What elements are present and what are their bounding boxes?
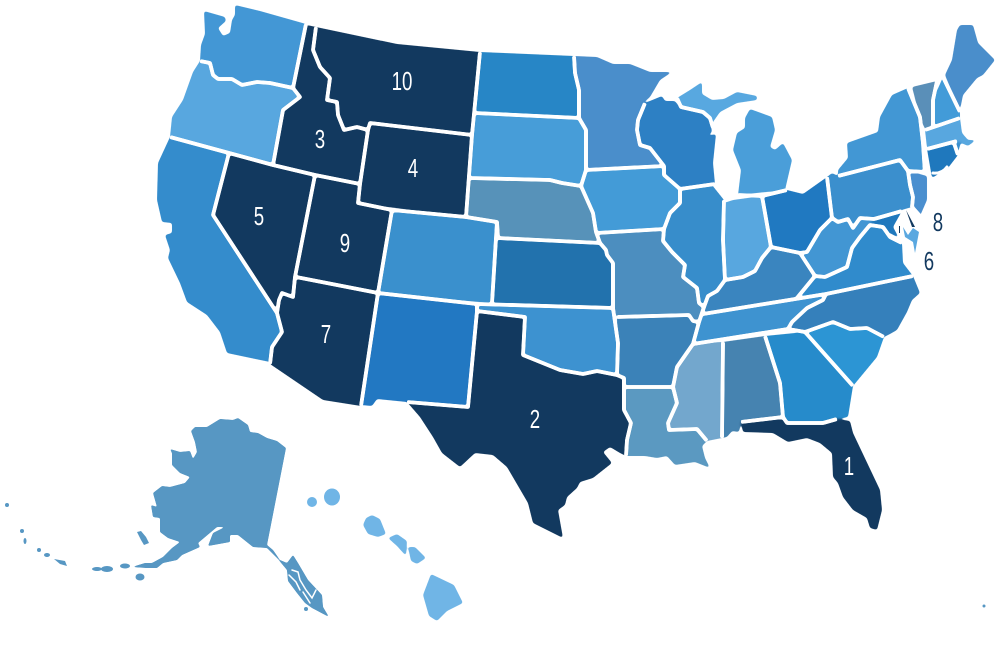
state: Michigan upper peninsula (677, 82, 757, 126)
state: Tennessee (693, 294, 826, 344)
Maryland eastern shore sliver (899, 226, 900, 233)
state: Oklahoma (477, 304, 618, 375)
state: Georgia (765, 332, 853, 423)
rank 9: Utah: 9 (340, 228, 350, 258)
state: Maine (945, 25, 995, 110)
state: Pennsylvania (827, 160, 913, 228)
state: New Mexico (361, 293, 477, 407)
Kauai (324, 488, 340, 506)
state: Texas (407, 311, 631, 538)
state: Vermont (912, 81, 937, 129)
state: Indiana (723, 196, 771, 280)
state: Colorado (378, 210, 497, 303)
rank 10: Montana: 10 (392, 66, 412, 96)
state: Rhode Island (954, 142, 961, 156)
Long Island channel (933, 167, 947, 173)
state: Hawaii (307, 488, 463, 621)
contiguous states (157, 5, 995, 538)
state: Arizona (270, 277, 378, 406)
Aleutian islands (5, 503, 986, 611)
rank 6: Virginia: 6 (924, 246, 934, 276)
rank 1: Florida: 1 (844, 451, 854, 481)
state: Alaska (5, 418, 986, 617)
state: Louisiana (624, 387, 710, 468)
state: Montana (313, 27, 480, 135)
state: West Virginia (800, 218, 874, 277)
state: Iowa (581, 166, 680, 233)
state: Minnesota (574, 56, 672, 170)
state: South Dakota (470, 113, 586, 186)
state: Michigan lower peninsula (733, 109, 792, 195)
state: Wyoming (358, 123, 472, 217)
state: Kansas (492, 238, 613, 308)
state: Illinois (663, 185, 725, 307)
state: South Carolina (805, 322, 884, 386)
Niihau (307, 497, 317, 507)
Oahu (363, 515, 386, 537)
rank 8: Maryland: 8 (933, 207, 943, 237)
state: Missouri (597, 229, 704, 322)
state: Nebraska (466, 178, 600, 243)
state: Ohio (762, 177, 832, 253)
state: Mississippi (668, 342, 723, 441)
state: Wisconsin (637, 96, 716, 189)
state: Idaho (273, 25, 368, 184)
state: Kentucky (703, 247, 815, 314)
Alaska panhandle channels (289, 570, 316, 603)
Virginia eastern shore (903, 227, 919, 253)
state: Washington (200, 5, 306, 88)
state: Connecticut (927, 143, 958, 178)
state borders (170, 24, 960, 456)
state: Utah (296, 175, 392, 293)
rank 2: Texas: 2 (530, 404, 540, 434)
rank 3: Idaho: 3 (315, 124, 325, 154)
state: New Hampshire (933, 77, 960, 128)
rank 5: Nevada: 5 (254, 201, 264, 231)
state: North Carolina (788, 276, 920, 337)
rank 4: Wyoming: 4 (408, 153, 418, 183)
rank 7: Arizona: 7 (321, 319, 331, 349)
state: Nevada (213, 153, 315, 313)
state: New York (838, 88, 925, 176)
rank labels (254, 66, 943, 481)
state: North Dakota (475, 52, 579, 118)
state: Oregon (170, 61, 300, 165)
state: Florida (741, 417, 882, 530)
state: Alabama (722, 336, 783, 438)
state: Massachusetts (925, 118, 976, 148)
state: New Jersey (908, 171, 927, 216)
state: California (157, 137, 282, 362)
Hawaii main islands (363, 515, 463, 621)
state: Maryland (870, 211, 902, 238)
Molokai (388, 534, 407, 556)
Nunivak island (137, 531, 149, 545)
Alaska mainland (132, 418, 329, 617)
Big Island (423, 574, 463, 621)
state: Arkansas (617, 315, 699, 387)
Maui (408, 547, 426, 564)
state: Delaware (906, 210, 915, 227)
state: Virginia (797, 225, 913, 298)
Kodiak island (136, 574, 144, 580)
